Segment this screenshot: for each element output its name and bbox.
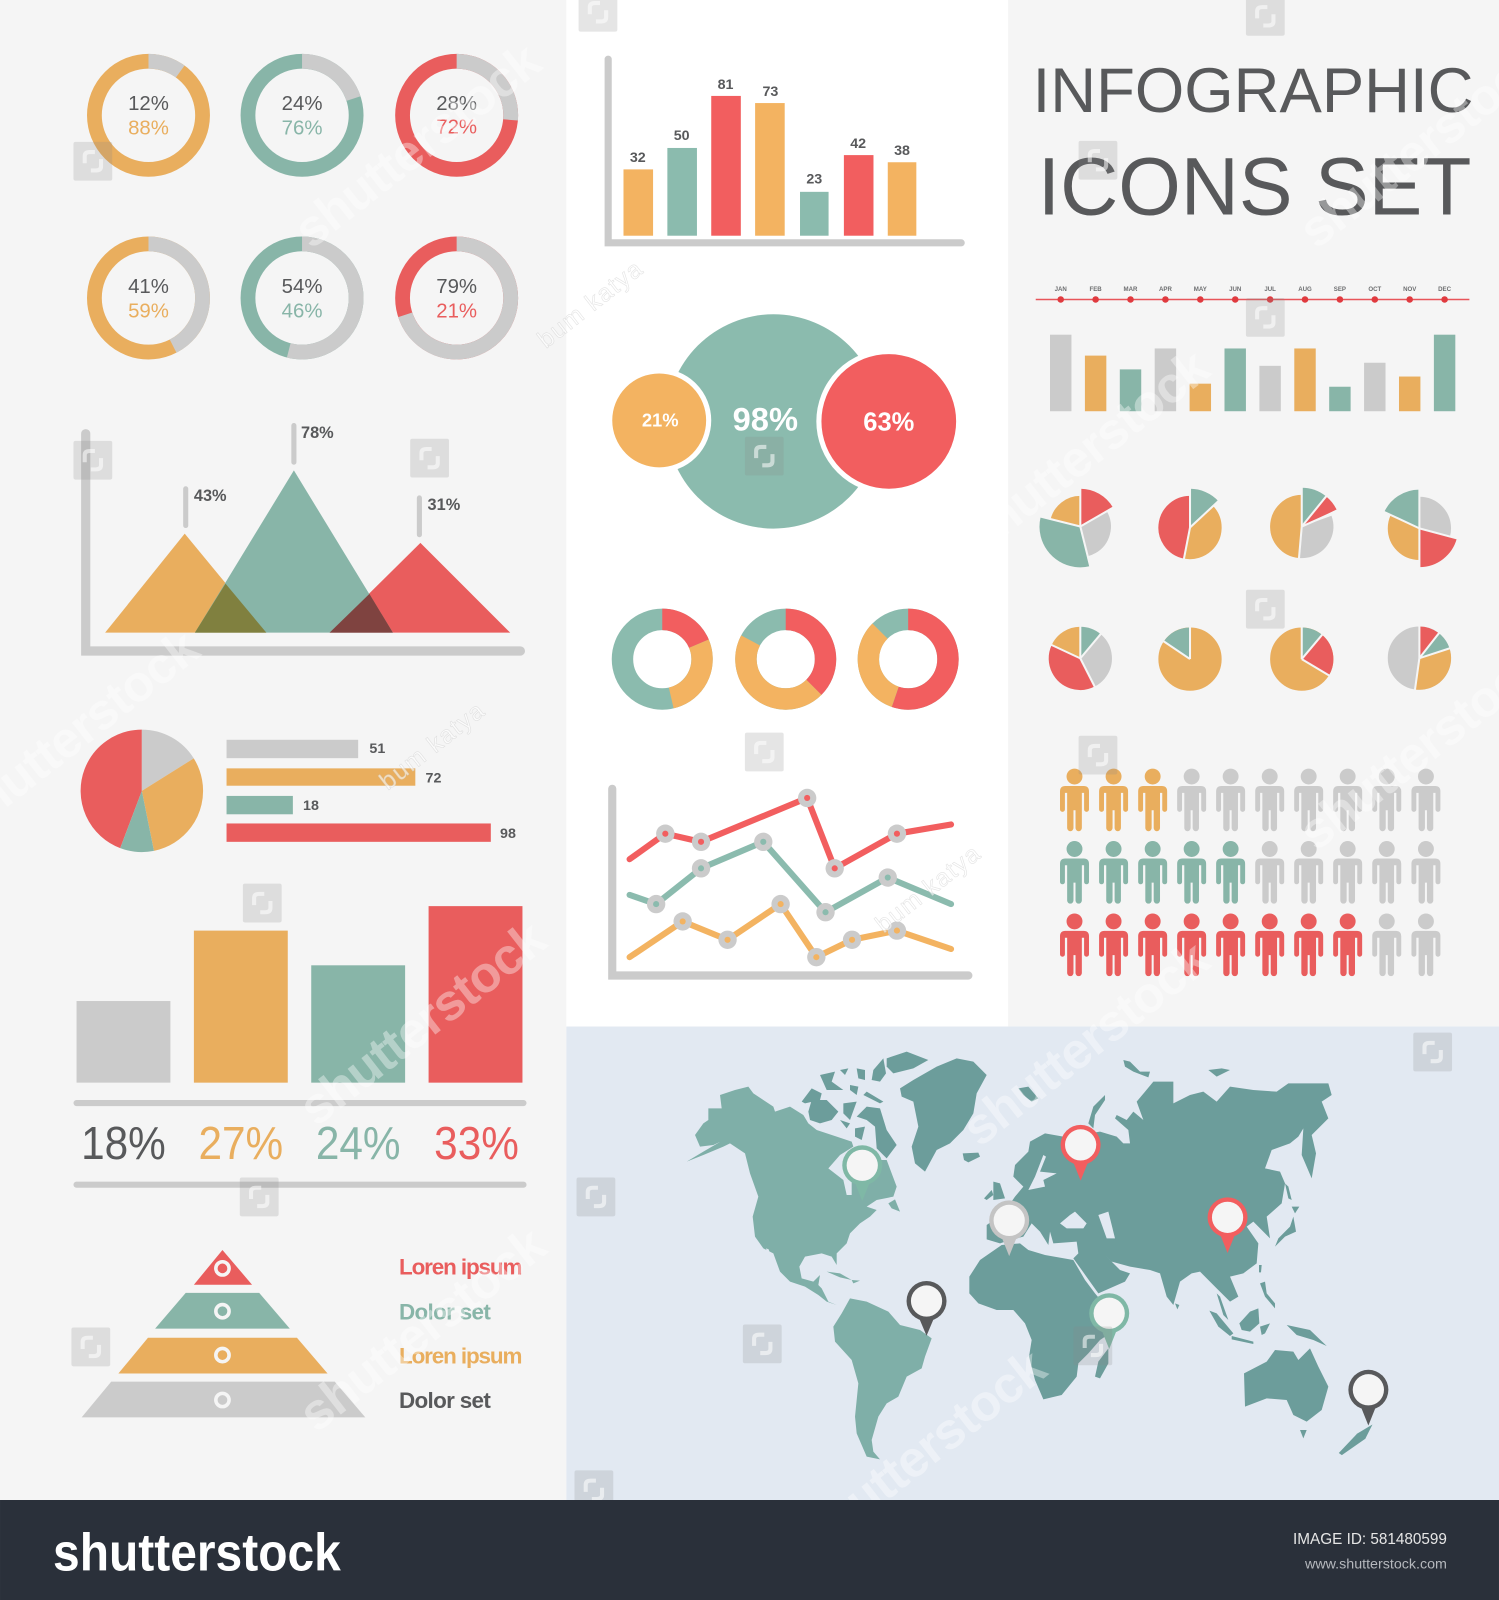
Australia bbox=[1244, 1348, 1328, 1422]
South America bbox=[833, 1298, 932, 1459]
pie 1 bbox=[1039, 486, 1116, 568]
pyramid with legend bbox=[82, 1250, 522, 1417]
pie chart with horizontal bars: 72 bbox=[426, 771, 441, 787]
ring 12/88: 88% bbox=[128, 118, 169, 140]
triangle area chart: 31% bbox=[428, 496, 461, 514]
ring 12/88: 12% bbox=[128, 93, 169, 115]
pin: East Africa bbox=[1089, 1293, 1129, 1349]
world map bbox=[687, 1052, 1372, 1459]
monthly timeline: JUN bbox=[1229, 286, 1241, 293]
progress rings bbox=[94, 61, 511, 352]
bubble diagram: 98% bbox=[733, 401, 798, 438]
bubble diagram: 63% bbox=[863, 409, 914, 437]
pyramid with legend: Loren ipsum bbox=[399, 1343, 522, 1368]
Caribbean islands bbox=[827, 1199, 900, 1283]
pie 3 bbox=[1274, 486, 1339, 561]
panel: map background bbox=[566, 1027, 1499, 1500]
monthly timeline: OCT bbox=[1368, 286, 1382, 293]
bar chart: centre bbox=[608, 59, 961, 243]
title: INFOGRAPHIC bbox=[1033, 56, 1473, 126]
pin: Europe bbox=[989, 1200, 1029, 1256]
watermark text: bum katya bbox=[871, 840, 986, 938]
bar chart: centre: 38 bbox=[894, 143, 910, 159]
watermark text: shutterstock bbox=[951, 337, 1220, 565]
ring 54/46 bbox=[248, 244, 356, 352]
monthly timeline: SEP bbox=[1334, 286, 1346, 293]
large column chart: 27% bbox=[198, 1117, 283, 1169]
monthly timeline: DEC bbox=[1438, 286, 1452, 293]
monthly timeline: MAR bbox=[1124, 286, 1138, 293]
monthly timeline: JAN bbox=[1055, 286, 1067, 293]
Tasmania bbox=[1300, 1430, 1307, 1438]
watermark text: shutterstock bbox=[951, 929, 1220, 1157]
pin: North America bbox=[842, 1145, 882, 1201]
bars bbox=[227, 740, 358, 758]
pie chart with horizontal bars bbox=[100, 740, 516, 842]
ring 28/72 bbox=[403, 61, 511, 169]
ring 54/46: 46% bbox=[282, 300, 322, 322]
Africa bbox=[969, 1243, 1123, 1399]
line chart bbox=[612, 789, 968, 976]
bar chart: centre: 81 bbox=[718, 77, 734, 93]
ring 41/59: 59% bbox=[128, 300, 169, 322]
bar chart: centre: 32 bbox=[630, 150, 646, 166]
ring 79/21: 79% bbox=[436, 276, 477, 298]
footer logo: shutterstock bbox=[53, 1523, 341, 1582]
Baja gulf bbox=[766, 1248, 775, 1270]
Eurasia bbox=[987, 1082, 1332, 1305]
ring 28/72: 72% bbox=[436, 117, 477, 139]
footer image id: IMAGE ID: 581480599 bbox=[1293, 1531, 1447, 1548]
ring 54/46: 54% bbox=[282, 276, 322, 298]
large column chart bbox=[77, 906, 523, 1185]
people icon grid bbox=[1060, 769, 1440, 976]
panel: right background bbox=[1008, 0, 1499, 1027]
pin: New Zealand bbox=[1348, 1370, 1388, 1426]
ring 41/59 bbox=[94, 244, 203, 352]
ring 28/72: 28% bbox=[436, 93, 477, 115]
triangle area chart: 43% bbox=[194, 487, 227, 505]
North and Central America bbox=[687, 1087, 897, 1305]
western hemisphere bbox=[687, 1052, 987, 1459]
bar chart: centre: 73 bbox=[762, 84, 778, 100]
pie 8 bbox=[1397, 624, 1451, 692]
pie 7 bbox=[1279, 625, 1331, 681]
bar chart: centre: 42 bbox=[850, 136, 866, 152]
British Isles and northern islands bbox=[984, 1060, 1292, 1200]
footer bbox=[0, 1500, 1499, 1600]
ring 24/76: 24% bbox=[282, 93, 322, 115]
large column chart: 18% bbox=[81, 1117, 166, 1169]
pie 4 bbox=[1382, 488, 1459, 569]
pin: Brazil bbox=[907, 1281, 947, 1336]
panel: centre background bbox=[566, 0, 1008, 1027]
monthly timeline: FEB bbox=[1090, 286, 1102, 293]
pie 2 bbox=[1168, 487, 1220, 562]
monthly timeline: AUG bbox=[1298, 286, 1312, 293]
ring 79/21: 21% bbox=[436, 300, 477, 322]
watermark text: shutterstock bbox=[283, 31, 552, 259]
pie 6 bbox=[1162, 625, 1212, 681]
pie chart with horizontal bars: 18 bbox=[303, 798, 319, 814]
ring 24/76 bbox=[248, 61, 356, 169]
large column chart: 33% bbox=[434, 1117, 519, 1169]
map pins bbox=[842, 1125, 1388, 1426]
pyramid with legend: Loren ipsum bbox=[399, 1254, 522, 1279]
monthly timeline bbox=[1036, 286, 1469, 303]
pie 5 bbox=[1050, 625, 1103, 688]
watermark text: bum katya bbox=[533, 256, 648, 354]
triangle area chart: 78% bbox=[301, 424, 334, 442]
pie chart with horizontal bars: 51 bbox=[369, 741, 385, 757]
donut 1 bbox=[610, 607, 714, 711]
pyramid with legend: Dolor set bbox=[399, 1299, 491, 1324]
New Zealand bbox=[1339, 1424, 1372, 1455]
donut 2 bbox=[729, 603, 842, 715]
monthly timeline: JUL bbox=[1264, 286, 1276, 293]
donut charts bbox=[610, 603, 959, 715]
ring 12/88 bbox=[94, 61, 203, 169]
pin: Russia bbox=[1061, 1125, 1101, 1181]
row: 5 of 10 bbox=[1060, 841, 1440, 904]
monthly bars bbox=[1050, 335, 1455, 411]
Arctic islands and Greenland bbox=[802, 1052, 987, 1172]
title bbox=[1033, 56, 1473, 232]
exploded pie charts bbox=[1039, 486, 1459, 692]
pie chart with horizontal bars: 98 bbox=[500, 826, 516, 842]
watermark text: shutterstock bbox=[788, 1337, 1057, 1565]
row: 3 of 10 bbox=[1060, 769, 1440, 831]
ring 24/76: 76% bbox=[282, 118, 322, 140]
pyramid with legend: Dolor set bbox=[399, 1388, 491, 1413]
monthly timeline: APR bbox=[1159, 286, 1172, 293]
triangle area chart bbox=[86, 424, 520, 651]
inland seas bbox=[1028, 1155, 1115, 1238]
bubble diagram bbox=[610, 314, 959, 529]
bar chart: centre: 50 bbox=[674, 128, 690, 144]
panel: left background bbox=[0, 0, 566, 1500]
watermark text: bum katya bbox=[375, 697, 490, 796]
row: 8 of 10 bbox=[1060, 913, 1440, 976]
title: ICONS SET bbox=[1038, 141, 1471, 232]
bar chart: centre: 23 bbox=[806, 172, 822, 188]
footer url: www.shutterstock.com bbox=[1304, 1556, 1447, 1572]
monthly timeline: MAY bbox=[1194, 286, 1207, 293]
large column chart: 24% bbox=[316, 1117, 401, 1169]
Madagascar bbox=[1095, 1348, 1108, 1378]
eastern hemisphere bbox=[969, 1060, 1332, 1438]
monthly timeline: NOV bbox=[1403, 286, 1417, 293]
watermark text: shutterstock bbox=[288, 1215, 557, 1442]
Japan and Southeast Asia bbox=[1175, 1207, 1327, 1346]
bubble diagram: 21% bbox=[642, 410, 679, 431]
ring 41/59: 41% bbox=[128, 276, 169, 298]
donut 3 bbox=[858, 609, 959, 710]
watermark text: shutterstock bbox=[288, 909, 557, 1136]
pin: China bbox=[1208, 1197, 1248, 1253]
pie bbox=[100, 749, 184, 833]
ring 79/21 bbox=[403, 244, 511, 352]
